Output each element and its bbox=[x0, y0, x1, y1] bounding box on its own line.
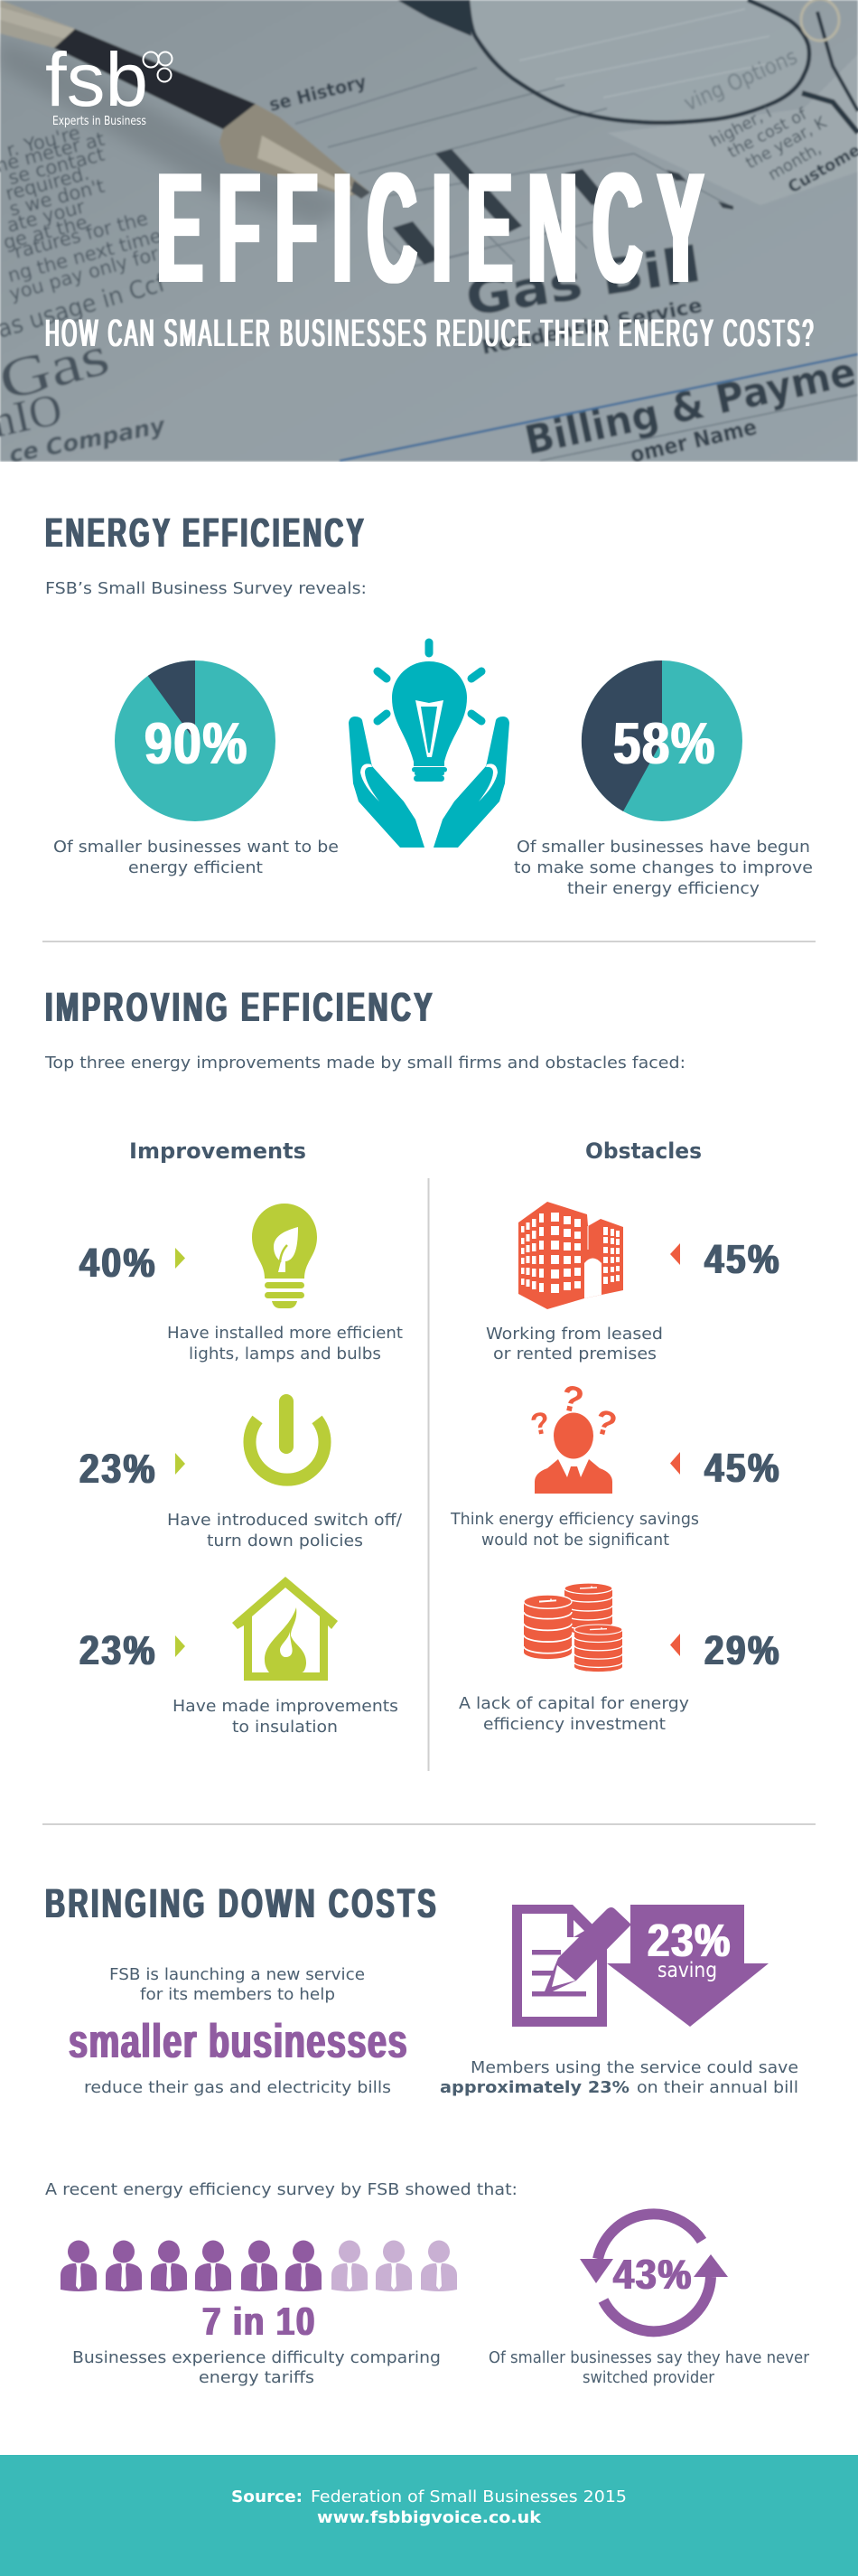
text: annual bill saving: on their annual bill bbox=[637, 2079, 798, 2097]
photo of gas bill, pen and glasses: required. bbox=[4, 163, 91, 205]
caption: never switched: Of smaller businesses say they have never bbox=[489, 2349, 810, 2367]
caption: tariffs: energy tariffs bbox=[199, 2369, 314, 2387]
photo of gas bill, pen and glasses: se contact bbox=[6, 144, 107, 189]
text: annual bill saving: Members using the service could save bbox=[471, 2059, 798, 2077]
icon: downward saving arrow: saving bbox=[657, 1959, 717, 1982]
heading: BRINGING DOWN COSTS bbox=[45, 1880, 439, 1926]
photo of gas bill, pen and glasses: you pay only for bbox=[7, 243, 162, 304]
caption: Have installed more efficient bbox=[167, 1325, 403, 1343]
caption: lights, lamps and bulbs bbox=[189, 1345, 381, 1363]
pie chart: 58% bbox=[582, 660, 742, 821]
caption: tariffs bbox=[72, 2349, 441, 2387]
panel: bringing down costs bbox=[45, 1880, 810, 2387]
caption: efficiency investment bbox=[483, 1716, 666, 1734]
arrow bbox=[670, 1452, 680, 1475]
caption: never switched bbox=[489, 2349, 810, 2387]
icon: office buildings bbox=[518, 1202, 623, 1309]
caption: never switched: switched provider bbox=[583, 2369, 715, 2387]
obstacle: 45% leased premises: 45% bbox=[704, 1236, 781, 1282]
improvement: 23% insulation: 23% bbox=[79, 1627, 157, 1673]
photo of gas bill, pen and glasses: the year, K bbox=[742, 113, 831, 173]
caption: or rented premises bbox=[493, 1345, 657, 1363]
caption: 58%: Of smaller businesses have begun bbox=[517, 838, 810, 857]
icon: person with question marks: ? bbox=[528, 1405, 553, 1443]
caption bbox=[486, 1325, 663, 1363]
column heading: improvements: Improvements bbox=[129, 1138, 306, 1164]
icon: person with question marks: ? bbox=[591, 1403, 620, 1445]
photo of gas bill, pen and glasses: ng the next time bbox=[5, 225, 163, 286]
text: new service: for its members to help bbox=[140, 1986, 335, 2004]
arrow bbox=[175, 1453, 185, 1475]
text: new service bbox=[109, 1966, 365, 2004]
caption: 90%: energy efficient bbox=[128, 859, 263, 877]
icon: person with question marks bbox=[528, 1378, 620, 1494]
heading: IMPROVING EFFICIENCY bbox=[45, 984, 435, 1030]
obstacle: 45% savings not significant bbox=[450, 1378, 781, 1550]
obstacle: 29% lack of capital bbox=[459, 1583, 781, 1734]
photo of gas bill, pen and glasses: ratures for the bbox=[12, 208, 150, 263]
icon: document and pen bbox=[512, 1905, 631, 2027]
caption bbox=[167, 1325, 403, 1363]
photo of gas bill, pen and glasses: omer Name bbox=[628, 414, 760, 468]
footer: source bbox=[0, 2455, 858, 2576]
caption: tariffs: Businesses experience difficulty comparing bbox=[72, 2349, 441, 2367]
icon: power button bbox=[249, 1394, 325, 1480]
fsb logo: Experts in Business bbox=[52, 114, 146, 128]
pen bbox=[0, 0, 370, 199]
obstacle: 29% lack of capital: 29% bbox=[704, 1627, 781, 1673]
icon: downward saving arrow: 23% bbox=[648, 1915, 732, 1966]
caption: 58%: their energy efficiency bbox=[567, 880, 760, 898]
photo of gas bill, pen and glasses: ate your bbox=[5, 196, 88, 237]
icon: person with question marks: ? bbox=[557, 1378, 587, 1421]
panel: improving efficiency bbox=[44, 984, 781, 1771]
arrow bbox=[175, 1635, 185, 1657]
caption: Working from leased bbox=[486, 1325, 663, 1344]
caption: A lack of capital for energy bbox=[459, 1695, 689, 1713]
printed document text: se History bbox=[266, 70, 368, 116]
photo of gas bill, pen and glasses: Gas Bill bbox=[462, 236, 704, 327]
photo of gas bill, pen and glasses: Residential Service bbox=[480, 295, 704, 360]
icon: downward saving arrow bbox=[607, 1905, 769, 2027]
obstacle: 45% savings not significant: 45% bbox=[704, 1445, 781, 1491]
heading: ENERGY EFFICIENCY bbox=[45, 510, 367, 556]
caption bbox=[459, 1695, 689, 1734]
text: new service: FSB is launching a new service bbox=[109, 1966, 365, 1984]
improvement: 23% insulation bbox=[79, 1577, 398, 1737]
icon: house with flame bbox=[232, 1577, 338, 1681]
icon: switching cycle with 43%: 43% bbox=[613, 2251, 693, 2298]
glasses bbox=[468, 0, 858, 133]
photo of gas bill, pen and glasses: month, bbox=[765, 139, 825, 184]
obstacle: 45% leased premises bbox=[486, 1202, 781, 1363]
caption: Think energy efficiency savings bbox=[450, 1511, 699, 1529]
intro text: FSB’s Small Business Survey reveals: bbox=[45, 580, 367, 598]
text: annual bill saving bbox=[440, 2059, 798, 2097]
arrow bbox=[175, 1248, 185, 1269]
improvement: 40% bbox=[79, 1204, 403, 1363]
improvement: 23% switch off bbox=[79, 1394, 402, 1550]
pictogram: business people bbox=[61, 2241, 457, 2291]
caption bbox=[167, 1512, 402, 1550]
caption: Have introduced switch off/ bbox=[167, 1512, 402, 1530]
footer: source: www.fsbbigvoice.co.uk bbox=[317, 2508, 542, 2527]
icon: bulb with leaf bbox=[252, 1204, 317, 1308]
intro text: Top three energy improvements made by small firms and obstacles faced: bbox=[44, 1054, 685, 1073]
fsb logo: fsb bbox=[45, 37, 148, 122]
photo of gas bill, pen and glasses: the cost of bbox=[724, 105, 810, 162]
highlight: smaller businesses: smaller businesses bbox=[69, 2015, 408, 2068]
caption: to insulation bbox=[232, 1719, 338, 1737]
stat: 7 in 10: 7 in 10 bbox=[202, 2300, 316, 2344]
photo of gas bill, pen and glasses: ving Options bbox=[680, 43, 801, 116]
icon: hands holding light bulb bbox=[349, 642, 509, 848]
caption bbox=[173, 1698, 398, 1737]
caption: 58% bbox=[514, 838, 813, 898]
caption: would not be significant bbox=[481, 1532, 669, 1550]
panel: energy efficiency bbox=[45, 510, 813, 898]
improvement: 40%: 40% bbox=[79, 1240, 157, 1286]
pie chart: 58%: 58% bbox=[613, 710, 716, 776]
photo of gas bill, pen and glasses bbox=[0, 0, 858, 468]
improvement: 23% switch off: 23% bbox=[79, 1446, 157, 1492]
caption: 90% bbox=[53, 838, 339, 877]
pie chart: 90%: 90% bbox=[145, 710, 248, 776]
photo of gas bill, pen and glasses: ce Company bbox=[7, 412, 169, 468]
text: reduce bills: reduce their gas and electricity bills bbox=[84, 2079, 391, 2097]
pie chart: 90% bbox=[115, 660, 275, 821]
footer: source: Federation of Small Businesses 2015 bbox=[311, 2487, 627, 2506]
text: annual bill saving: approximately 23% bbox=[440, 2079, 630, 2097]
photo of gas bill, pen and glasses: r. You're bbox=[5, 122, 82, 162]
arrow bbox=[670, 1243, 680, 1265]
photo of gas bill, pen and glasses: higher, i bbox=[706, 103, 775, 151]
caption: Have made improvements bbox=[173, 1698, 398, 1716]
footer: source: Source: bbox=[231, 2487, 303, 2506]
caption: turn down policies bbox=[207, 1532, 363, 1550]
photo of gas bill, pen and glasses: ge at the bbox=[1, 211, 89, 254]
caption: 58%: to make some changes to improve bbox=[514, 859, 813, 877]
header banner with billing photo bbox=[0, 0, 858, 468]
caption bbox=[450, 1511, 699, 1550]
icon: coin stacks bbox=[524, 1583, 622, 1672]
column heading: obstacles: Obstacles bbox=[585, 1138, 702, 1164]
survey intro text: A recent energy efficiency survey by FSB showed that: bbox=[45, 2181, 518, 2199]
caption: 90%: Of smaller businesses want to be bbox=[53, 838, 339, 857]
photo of gas bill, pen and glasses: s we don't bbox=[7, 175, 107, 220]
arrow bbox=[670, 1634, 680, 1656]
icon: switching cycle with 43% bbox=[580, 2214, 728, 2331]
